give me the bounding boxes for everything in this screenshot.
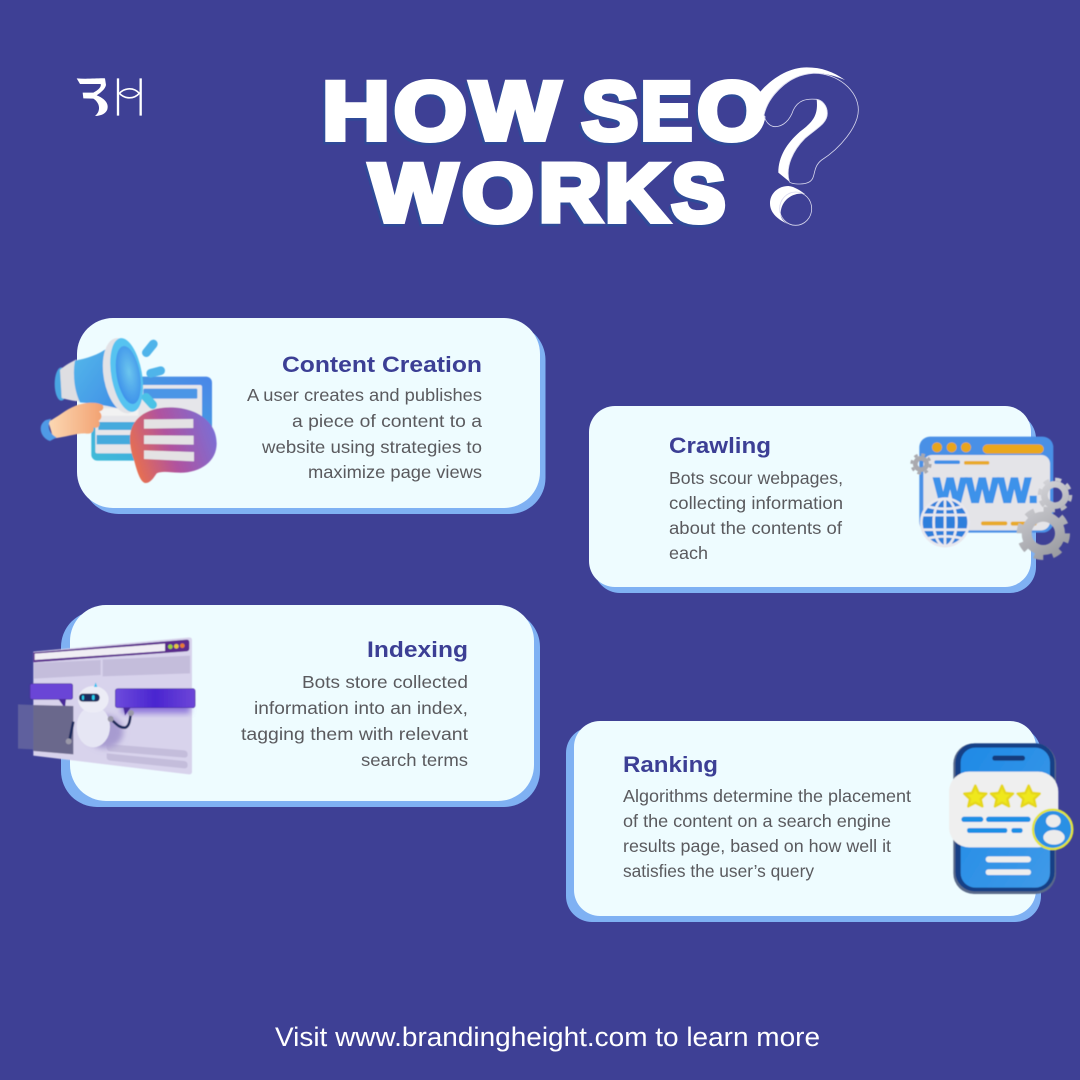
robot [66,682,134,747]
title line 2 [370,148,725,239]
heading: content creation: Content Creation [282,352,482,377]
title shadow: S [580,68,636,160]
glass panel [18,704,73,754]
text: ranking description [623,786,911,881]
small gear [912,455,930,473]
text: indexing description: search terms [361,750,468,770]
text: content creation description [247,385,482,482]
title shadow: H [320,68,388,160]
robot shadow [87,715,123,748]
megaphone [55,335,148,416]
text: indexing description: Bots store collected [302,672,468,692]
title line 1: S [582,66,638,157]
text: indexing description: information into an index, [254,698,468,718]
footer call to action: Visit www.brandingheight.com to learn more [275,1022,820,1052]
title shadow: W [368,150,455,242]
logo [77,78,141,116]
title shadow: R [537,150,600,242]
title line 2: K [605,148,668,239]
title line 2: O [462,148,533,239]
text: content creation description: maximize page views [308,462,482,482]
avatar badge [1033,810,1072,849]
question mark [759,67,860,225]
text: crawling description: each [669,543,708,563]
icon: megaphone and chat bubble [41,335,217,483]
large gear [1019,509,1067,557]
panel: content creation [77,318,546,514]
title shadow: O [392,68,464,160]
globe [921,498,969,546]
medium gear [1039,479,1071,511]
title shadow: O [460,150,531,242]
text: crawling description: about the contents of [669,518,842,538]
text: content creation description: website using strategies to [261,437,482,457]
text: ranking description: satisfies the user’s query [623,861,814,881]
panel: ranking [566,721,1041,922]
icon: www browser with globe and gears [912,437,1071,557]
www label: WWW. [934,472,1038,510]
title shadow [320,68,764,242]
hand [41,403,103,441]
icon: phone with star rating [949,743,1072,894]
title line 1: E [641,66,692,157]
text: crawling description: Bots scour webpages, [669,468,843,488]
left speech bubble [30,684,73,708]
text: indexing description: tagging them with relevant [241,724,468,744]
title line 2: S [672,148,725,239]
title shadow: E [639,68,690,160]
text: ranking description: results page, based on how well it [623,836,891,856]
panel: indexing [61,605,540,807]
panel: crawling [589,406,1036,593]
title [320,66,766,242]
icon: robot on browser window [18,637,195,774]
title line 1: O [394,66,466,157]
title line 2: W [370,148,457,239]
title line 1: W [471,66,560,157]
megaphone rays [146,344,161,405]
title shadow: O [696,68,764,160]
heading: indexing: Indexing [367,637,468,662]
title line 1: O [698,66,766,157]
title shadow: S [670,150,723,242]
title shadow: K [603,150,666,242]
title line 1: H [322,66,390,157]
text: ranking description: of the content on a search engine [623,811,891,831]
title line 2: R [539,148,602,239]
right speech bubble [115,689,195,716]
title line 1 [322,66,766,157]
text: ranking description: Algorithms determine the placement [623,786,911,806]
title shadow: W [469,68,558,160]
text: indexing description [241,672,468,770]
text: crawling description [669,468,843,563]
heading: ranking: Ranking [623,752,718,777]
text: content creation description: a piece of content to a [292,411,482,431]
heading: crawling: Crawling [669,433,771,458]
text: crawling description: collecting information [669,493,843,513]
text: content creation description: A user creates and publishes [247,385,482,405]
stars [964,786,1040,806]
